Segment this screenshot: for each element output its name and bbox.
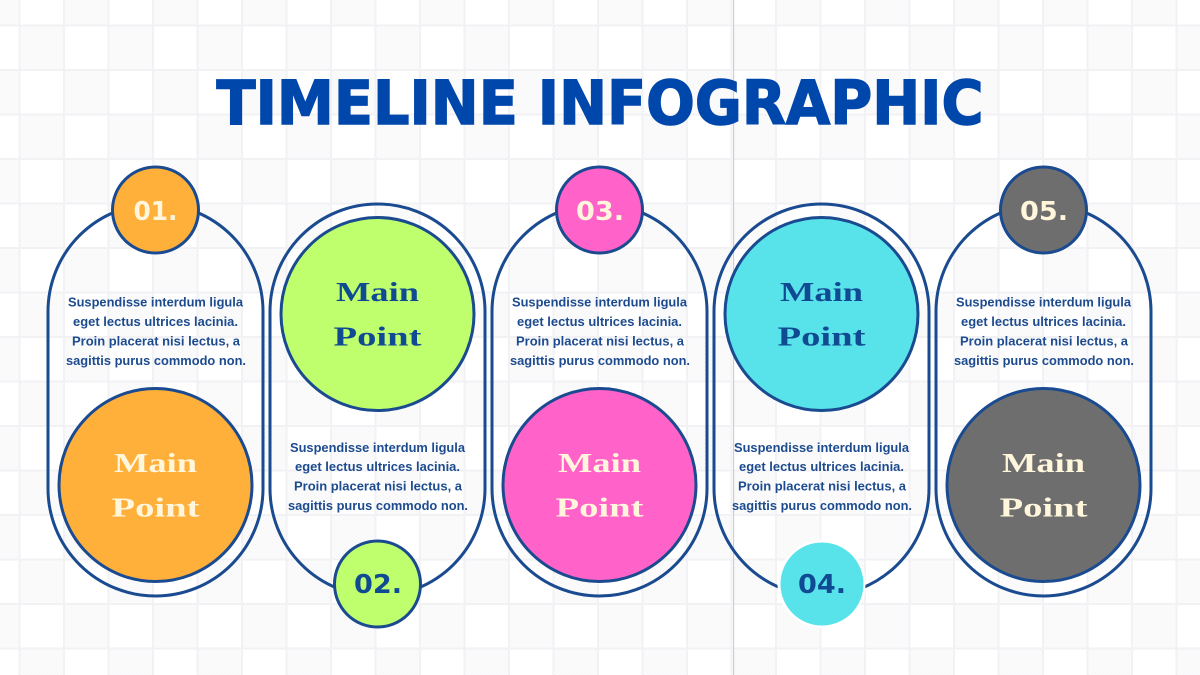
number badge 02 [334,541,420,627]
description 2: Proin placerat nisi lectus, a [294,478,463,494]
description 1: sagittis purus commodo non. [66,353,246,368]
main point circle 2: Main [336,277,419,307]
number badge 05 [1000,167,1086,253]
pill outline 4 [714,204,929,596]
main point circle 2: Point [334,322,422,352]
description 2: sagittis purus commodo non. [288,498,468,513]
main point circle 5: Main [1002,448,1085,478]
description 5: sagittis purus commodo non. [954,353,1134,368]
description 2: eget lectus ultrices lacinia. [295,459,460,474]
panel: step 3 [492,167,707,596]
main point circle 1: Main [114,448,197,478]
main point circle 3 [503,388,696,582]
number badge 03 [556,167,642,253]
panel: step 5 [936,167,1151,596]
number badge 05: 05. [1020,197,1068,227]
panel: step 1 [48,167,263,596]
pill outline 5 [936,204,1151,596]
main point circle 1: Point [112,492,200,522]
pill outline 2 [270,204,485,596]
description 4: Proin placerat nisi lectus, a [738,478,907,494]
number badge 04: 04. [798,570,846,600]
description 3: Proin placerat nisi lectus, a [516,334,685,348]
description 1: Proin placerat nisi lectus, a [72,334,241,348]
description 5: eget lectus ultrices lacinia. [961,314,1126,329]
number badge 02: 02. [354,570,402,600]
description 4: eget lectus ultrices lacinia. [739,459,904,474]
description 4: sagittis purus commodo non. [732,498,912,513]
pill outline 1 [48,204,263,596]
main point circle 4: Main [780,277,863,307]
main point circle 4: Point [778,322,866,352]
main point circle 5: Point [1000,492,1088,522]
description 1: Suspendisse interdum ligula [68,294,244,310]
description 2: Suspendisse interdum ligula [290,440,466,455]
main point circle 2 [281,218,474,410]
description 3: eget lectus ultrices lacinia. [517,314,682,329]
number badge 04 [778,540,866,628]
panel: step 4 [714,204,929,628]
main point circle 3: Point [556,492,644,522]
panel: step 2 [270,204,485,627]
description 3: sagittis purus commodo non. [510,353,690,368]
description 1: eget lectus ultrices lacinia. [73,314,238,329]
description 4: Suspendisse interdum ligula [734,440,910,455]
title: TIMELINE INFOGRAPHIC [216,68,984,139]
main point circle 1 [59,388,252,582]
description 5: Proin placerat nisi lectus, a [960,334,1129,348]
pill outline 3 [492,204,707,596]
number badge 01: 01. [134,197,178,227]
description 3: Suspendisse interdum ligula [512,294,688,310]
number badge 03: 03. [576,197,624,227]
number badge 01 [112,167,198,253]
main point circle 3: Main [558,448,641,478]
description 5: Suspendisse interdum ligula [956,294,1132,310]
main point circle 4 [725,218,918,410]
main point circle 5 [947,388,1140,582]
